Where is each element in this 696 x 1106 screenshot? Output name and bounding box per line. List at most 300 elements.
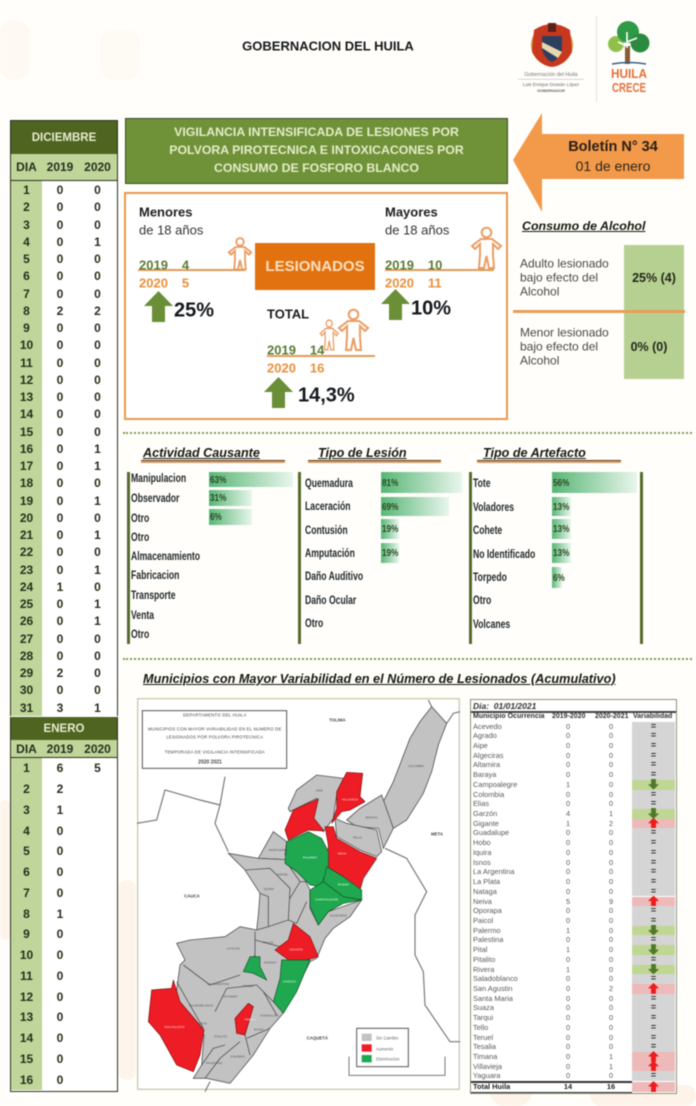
table: municipios: 1 <box>609 1052 613 1061</box>
table: municipios: 0 <box>609 1042 613 1051</box>
table: municipios: 0 <box>566 1052 570 1061</box>
table: municipios: = <box>651 750 656 760</box>
table: municipios: 0 <box>566 877 570 886</box>
table: municipios: Colombia <box>473 790 504 798</box>
heading: actividad causante: Actividad Causante <box>143 446 260 460</box>
chart: tipo de artefacto: Otro <box>473 595 491 607</box>
map place labels: GUADALUPE <box>260 1014 279 1018</box>
chart: tipo de lesion: Amputación <box>305 548 355 560</box>
table: municipios: 0 <box>566 741 570 750</box>
table: municipios: Pital <box>473 945 487 954</box>
table: municipios: = <box>651 740 656 750</box>
chart: tipo de artefacto: 13% <box>553 523 569 535</box>
table: diciembre: 1 <box>94 563 101 577</box>
chart: actividad causante: Fabricacion <box>131 570 179 582</box>
heading: diciembre: DICIEMBRE <box>32 132 96 144</box>
map legend <box>349 1028 445 1075</box>
table: municipios: 0 <box>566 955 570 964</box>
table: municipios: 0 <box>609 760 613 769</box>
map place labels: SAN AGUSTIN <box>164 1025 184 1029</box>
table: diciembre: 1 <box>94 528 101 542</box>
table: municipios: 0 <box>609 741 613 750</box>
chart: tipo de lesion <box>304 471 462 630</box>
map place labels: OPORAPA <box>223 995 237 999</box>
table: diciembre: 0 <box>57 269 63 283</box>
table: diciembre: 0 <box>94 200 101 214</box>
table: diciembre: 12 <box>20 373 33 387</box>
table: diciembre: 0 <box>94 545 101 559</box>
table: diciembre: 0 <box>94 218 101 232</box>
table: municipios: 0 <box>609 887 613 896</box>
table: municipios: 0 <box>609 751 613 760</box>
logo: huila crece tree: HUILA <box>611 67 647 81</box>
table: municipios: 0 <box>609 1023 613 1032</box>
table: municipios: = <box>651 847 656 857</box>
table: municipios: Garzón <box>473 809 497 818</box>
table header: dia 2019 2020: 2019 <box>47 160 73 174</box>
chart: actividad causante: Otro <box>131 513 149 525</box>
map place labels: PALERMO <box>303 855 318 859</box>
values: total 2019: 2019 14 <box>267 342 324 358</box>
table: diciembre: 0 <box>57 649 63 663</box>
table: diciembre: 0 <box>57 252 63 266</box>
table: municipios: 0 <box>609 828 613 837</box>
table: municipios: = <box>651 837 656 847</box>
table: municipios: Baraya <box>473 770 496 779</box>
map place labels: PALESTINA <box>206 1061 222 1065</box>
map place labels: CAMPOALEGRE <box>315 897 338 901</box>
text: menor lesionado <box>520 326 609 368</box>
map region labels: TOLIMA <box>329 718 346 723</box>
table: diciembre: 2 <box>94 304 101 318</box>
chart: tipo de artefacto: Voladores <box>473 502 514 514</box>
table: diciembre: 0 <box>94 183 101 197</box>
chart: tipo de lesion: 19% <box>382 523 398 535</box>
chart: tipo de lesion: 69% <box>382 500 398 512</box>
text: adulto lesionado: bajo efecto del <box>520 271 598 285</box>
chart: actividad causante: 63% <box>210 474 226 486</box>
values: menores 2020: 2020 5 <box>139 276 189 290</box>
chart: tipo de lesion: Otro <box>305 618 323 630</box>
table: municipios: 0 <box>566 906 570 915</box>
text: menor lesionado: Alcohol <box>520 354 559 368</box>
table: enero: 0 <box>57 927 63 941</box>
table header: dia 2019 2020 enero: 2019 <box>47 742 73 756</box>
logo: gobernacion del huila crest: Gobernación del Huila <box>524 72 578 78</box>
table: enero: 0 <box>57 865 63 879</box>
table: diciembre: 18 <box>20 476 33 490</box>
banner heading <box>125 118 508 184</box>
text: menor lesionado: bajo efecto del <box>520 340 598 354</box>
table date: Dia: 01/01/2021 <box>473 701 536 711</box>
table: municipios: 0 <box>566 848 570 857</box>
table: municipios: 0 <box>566 994 570 1003</box>
banner heading: POLVORA PIROTECNICA E INTOXICACONES POR <box>169 143 464 157</box>
table: diciembre: 20 <box>20 511 33 525</box>
table: diciembre: 0 <box>94 580 101 594</box>
table: municipios: = <box>651 1002 656 1012</box>
table header <box>472 712 673 720</box>
table: municipios: Aipe <box>473 741 488 750</box>
map place labels: AIPE <box>316 789 323 793</box>
label: de 18 anos menores: de 18 años <box>139 222 203 238</box>
map title box: 2020 2021 <box>198 760 222 766</box>
table: diciembre: 0 <box>94 356 101 370</box>
table: municipios: 0 <box>609 1003 613 1012</box>
table: municipios: Oporapa <box>473 906 502 915</box>
chart: actividad causante <box>130 471 293 641</box>
table: diciembre: 1 <box>23 183 30 197</box>
table: diciembre: 0 <box>57 200 63 214</box>
table total: 16 <box>607 1082 615 1091</box>
table: municipios: Paicol <box>473 916 493 925</box>
table: enero: 0 <box>57 824 63 838</box>
table: municipios: = <box>651 1070 656 1080</box>
table: diciembre: 27 <box>20 632 33 646</box>
table: municipios: 0 <box>566 1003 570 1012</box>
values: total 2020: 2020 16 <box>267 360 324 376</box>
table: diciembre: 3 <box>57 701 63 715</box>
table: municipios: 4 <box>566 809 570 818</box>
table: municipios: Campoalegre <box>473 780 517 789</box>
heading: tipo de lesion: Tipo de Lesión <box>318 446 407 460</box>
heading: tipo de artefacto: Tipo de Artefacto <box>483 446 586 460</box>
map legend: Disminucion <box>376 1056 400 1061</box>
table header: dia 2019 2020: 2020 <box>84 160 111 174</box>
table: diciembre: 0 <box>57 390 63 404</box>
table: municipios: 0 <box>609 974 613 983</box>
map place labels: TARQUI <box>242 984 254 988</box>
text: adulto lesionado <box>520 257 609 299</box>
chart: tipo de lesion: Daño Auditivo <box>305 571 363 583</box>
map place labels: PAICOL <box>263 940 274 944</box>
table: diciembre <box>10 120 118 716</box>
table: diciembre: 0 <box>57 407 63 421</box>
map place labels: BARAYA <box>366 816 378 820</box>
banner heading: CONSUMO DE FOSFORO BLANCO <box>214 161 419 175</box>
table: diciembre: 0 <box>57 563 63 577</box>
table: diciembre: 0 <box>57 287 63 301</box>
table total <box>472 1080 676 1093</box>
table: diciembre: 1 <box>94 597 101 611</box>
map title box: TEMPORADA DE VIGILANCIA INTENSIFICADA <box>165 749 265 754</box>
heading: consumo de alcohol: Consumo de Alcohol <box>522 219 645 233</box>
table: municipios: 0 <box>609 964 613 974</box>
table header: 2020-2021 <box>595 713 628 720</box>
table: enero: 0 <box>57 1073 63 1087</box>
table: municipios: 0 <box>609 877 613 886</box>
table: municipios: = <box>651 993 656 1003</box>
table: municipios: Gigante <box>473 819 499 828</box>
table: municipios: 0 <box>566 799 570 808</box>
table header: Municipio Ocurrencia <box>473 713 545 720</box>
chart: tipo de artefacto: Cohete <box>473 525 502 537</box>
table: diciembre: 0 <box>94 425 101 439</box>
municipalities red <box>148 772 377 1072</box>
map place labels: GIGANTE <box>289 947 303 951</box>
table: enero: 4 <box>23 824 30 838</box>
table: diciembre: 0 <box>57 683 63 697</box>
table: diciembre: 1 <box>94 701 101 715</box>
map place labels: SUAZA <box>254 1028 264 1032</box>
table: diciembre: 0 <box>57 511 63 525</box>
chart: tipo de lesion: Contusión <box>305 525 348 537</box>
map place labels: SANTA MARIA <box>268 848 288 852</box>
table: municipios: 1 <box>609 1062 613 1071</box>
chart: actividad causante: Observador <box>131 493 179 505</box>
table: municipios: 0 <box>566 887 570 896</box>
table: enero: 0 <box>57 948 63 962</box>
table: enero: 3 <box>23 803 30 817</box>
map place labels: TERUEL <box>277 872 289 876</box>
arrow: menores up <box>144 290 174 323</box>
table header: 2019-2020 <box>552 713 585 720</box>
table: diciembre: 1 <box>94 235 101 249</box>
table: municipios: = <box>651 759 656 769</box>
map place labels: ACEVEDO <box>230 1055 246 1059</box>
table: diciembre: 10 <box>20 338 33 352</box>
table: municipios: Santa Maria <box>473 994 513 1003</box>
table: enero: 0 <box>57 1031 63 1045</box>
table: municipios: 0 <box>566 838 570 847</box>
map place labels: COLOMBIA <box>408 764 424 768</box>
table: municipios: = <box>651 954 656 964</box>
table: municipios: 1 <box>566 926 570 935</box>
heading: municipios: Municipios con Mayor Variabilidad en el Número de Lesionados (Acumulativo) <box>143 672 616 686</box>
table: diciembre: 7 <box>23 287 30 301</box>
chart: actividad causante: Otro <box>131 532 149 544</box>
table: diciembre: 0 <box>94 666 101 680</box>
chart: tipo de artefacto: 56% <box>553 476 569 488</box>
table: diciembre: 5 <box>23 252 30 266</box>
table: municipios: 0 <box>566 984 570 993</box>
table: municipios: 2 <box>609 819 613 828</box>
map region labels <box>184 718 444 1040</box>
table header: dia 2019 2020 <box>11 154 117 181</box>
table total: Total Huila <box>473 1082 510 1091</box>
table: diciembre: 23 <box>20 563 33 577</box>
table: diciembre: 0 <box>57 218 63 232</box>
table: enero: 13 <box>20 1010 33 1024</box>
map place labels: PITALITO <box>214 1034 228 1038</box>
table: municipios: Isnos <box>473 858 491 867</box>
table: municipios: = <box>651 973 656 983</box>
table: diciembre: 0 <box>57 614 63 628</box>
table: municipios: = <box>651 769 656 779</box>
table: municipios: Algeciras <box>473 751 503 760</box>
heading: diciembre <box>11 120 117 154</box>
table: diciembre: 15 <box>20 425 33 439</box>
chart: actividad causante: Almacenamiento <box>131 551 200 563</box>
table: municipios: = <box>651 827 656 837</box>
values: menores 2019: 2019 4 <box>139 258 189 272</box>
chart: actividad causante: Transporte <box>131 590 176 602</box>
table: municipios: 0 <box>566 867 570 876</box>
table: diciembre: 14 <box>20 407 33 421</box>
table: municipios: Guadalupe <box>473 828 509 837</box>
table: enero: 14 <box>20 1031 33 1045</box>
table: municipios: 0 <box>609 780 613 789</box>
chart: tipo de lesion: Quemadura <box>305 478 353 490</box>
table: municipios: 0 <box>609 945 613 954</box>
table: municipios: 0 <box>566 935 570 944</box>
table: municipios: 0 <box>566 1042 570 1051</box>
chart: actividad causante: Manipulacion <box>131 473 186 485</box>
table: municipios: 0 <box>566 1023 570 1032</box>
map region labels: CAQUETÁ <box>307 1035 329 1040</box>
map place labels: RIVERA <box>338 882 349 886</box>
map title box: LESIONADOS POR POLVORA PIROTECNICA <box>166 734 263 739</box>
table: diciembre: 0 <box>57 442 63 456</box>
table: municipios: = <box>651 934 656 944</box>
table: municipios: = <box>651 1041 656 1051</box>
arrow: boletin <box>512 112 685 212</box>
table: diciembre: 0 <box>94 476 101 490</box>
table: diciembre: 1 <box>57 580 63 594</box>
table: municipios: 0 <box>566 722 570 730</box>
table: municipios: Neiva <box>473 896 492 906</box>
table: municipios: 1 <box>609 809 613 818</box>
table: diciembre: 0 <box>94 287 101 301</box>
table: municipios: 1 <box>566 780 570 789</box>
table: diciembre: 30 <box>20 683 33 697</box>
table: municipios: Elias <box>473 799 489 808</box>
table: diciembre: 0 <box>57 632 63 646</box>
banner heading: VIGILANCIA INTENSIFICADA DE LESIONES POR <box>174 125 459 139</box>
panel: alcohol values <box>624 245 684 379</box>
table: diciembre: 0 <box>94 407 101 421</box>
table: diciembre: 0 <box>94 511 101 525</box>
values: mayores 2020: 2020 11 <box>385 276 442 290</box>
table: municipios: 2 <box>609 984 613 993</box>
table: municipios: Altamira <box>473 760 500 769</box>
chart: tipo de artefacto: Tote <box>473 478 491 490</box>
map place labels: ISNOS <box>198 1021 207 1025</box>
table: municipios: Palestina <box>473 935 503 944</box>
table: municipios: = <box>651 857 656 867</box>
table: enero: 12 <box>20 990 33 1004</box>
chart: tipo de lesion: 81% <box>382 476 398 488</box>
table: municipios: 0 <box>566 1062 570 1071</box>
table: municipios: 0 <box>566 1071 570 1080</box>
table: diciembre: 0 <box>57 597 63 611</box>
map title box <box>142 711 287 768</box>
table: diciembre: 0 <box>94 683 101 697</box>
title: GOBERNACION DEL HUILA <box>242 38 414 54</box>
table: diciembre: 21 <box>20 528 33 542</box>
table: municipios: = <box>651 886 656 896</box>
table: diciembre: 13 <box>20 390 33 404</box>
table: municipios: Pitalito <box>473 955 495 964</box>
table: diciembre: 17 <box>20 459 33 473</box>
table: diciembre: 2 <box>57 304 63 318</box>
icon: adult and child <box>318 308 370 352</box>
percentage: menores: 25% <box>174 300 214 322</box>
table: enero: 1 <box>23 761 30 775</box>
table: diciembre: 4 <box>23 235 30 249</box>
table: municipios: = <box>651 788 656 798</box>
table: enero: 2 <box>23 782 30 796</box>
map place labels: IQUIRA <box>264 887 274 891</box>
table: diciembre: 0 <box>57 356 63 370</box>
table: diciembre: 11 <box>20 356 33 370</box>
chart: tipo de artefacto <box>472 471 637 631</box>
table: municipios: = <box>651 905 656 915</box>
boletin number: Boletín N° 34 <box>568 139 658 155</box>
table: municipios: 0 <box>609 1013 613 1022</box>
table: diciembre: 0 <box>94 649 101 663</box>
table: municipios: Suaza <box>473 1003 494 1012</box>
table: municipios: Tello <box>473 1023 488 1032</box>
panel: lesionados <box>124 192 508 420</box>
table: municipios: 0 <box>566 828 570 837</box>
table: municipios: 0 <box>609 838 613 847</box>
table: municipios: 0 <box>609 916 613 925</box>
text: menor lesionado: Menor lesionado <box>520 326 609 340</box>
chart: tipo de lesion: 19% <box>382 547 398 559</box>
table: diciembre: 0 <box>94 338 101 352</box>
table: enero: 1 <box>57 803 63 817</box>
label: total: TOTAL <box>267 306 309 322</box>
chart: tipo de artefacto: 13% <box>553 500 569 512</box>
line: total <box>267 355 375 357</box>
table: diciembre: 2 <box>23 200 30 214</box>
table: municipios: Tesalia <box>473 1042 496 1051</box>
table: municipios: Nataga <box>473 887 497 896</box>
table: municipios: 0 <box>609 955 613 964</box>
table: municipios: Rivera <box>473 964 494 974</box>
table: enero: 6 <box>57 761 63 775</box>
table: municipios: Palermo <box>473 926 501 935</box>
table: municipios: 0 <box>609 906 613 915</box>
table: municipios: Hobo <box>473 838 491 847</box>
table: diciembre: 0 <box>94 269 101 283</box>
table: diciembre: 8 <box>23 304 30 318</box>
table: municipios: Acevedo <box>473 722 502 730</box>
table: municipios: Saladoblanco <box>473 974 518 983</box>
table: diciembre: 25 <box>20 597 33 611</box>
table: diciembre: 0 <box>94 390 101 404</box>
table: enero: 9 <box>23 927 30 941</box>
table: municipios: 0 <box>609 994 613 1003</box>
table: municipios: 1 <box>566 945 570 954</box>
table: municipios: = <box>651 1022 656 1032</box>
map: huila municipios <box>136 698 461 1092</box>
map legend: Aumento <box>376 1046 394 1051</box>
table: municipios: Yaguara <box>473 1071 500 1080</box>
table: municipios: = <box>651 798 656 808</box>
table: municipios: = <box>651 720 656 730</box>
table: diciembre: 0 <box>57 338 63 352</box>
table: enero: 0 <box>57 886 63 900</box>
table: municipios: 0 <box>609 799 613 808</box>
table: municipios: Agrado <box>473 731 497 740</box>
table: municipios: 0 <box>609 858 613 867</box>
table: diciembre: 3 <box>23 218 30 232</box>
table: municipios: Iquira <box>473 848 492 857</box>
arrow: mayores up <box>380 288 410 321</box>
logo: gobernacion del huila crest: GOBERNADOR <box>537 89 565 93</box>
table: municipios: 0 <box>609 790 613 798</box>
map place labels: LA PLATA <box>227 946 240 950</box>
table: enero: 0 <box>57 844 63 858</box>
chart: tipo de artefacto: Volcanes <box>473 619 510 631</box>
table: diciembre: 29 <box>20 666 33 680</box>
table: municipios: = <box>651 915 656 925</box>
table: enero: 8 <box>23 907 30 921</box>
map place labels: ALGECIRAS <box>330 913 347 917</box>
table: municipios: 0 <box>566 974 570 983</box>
